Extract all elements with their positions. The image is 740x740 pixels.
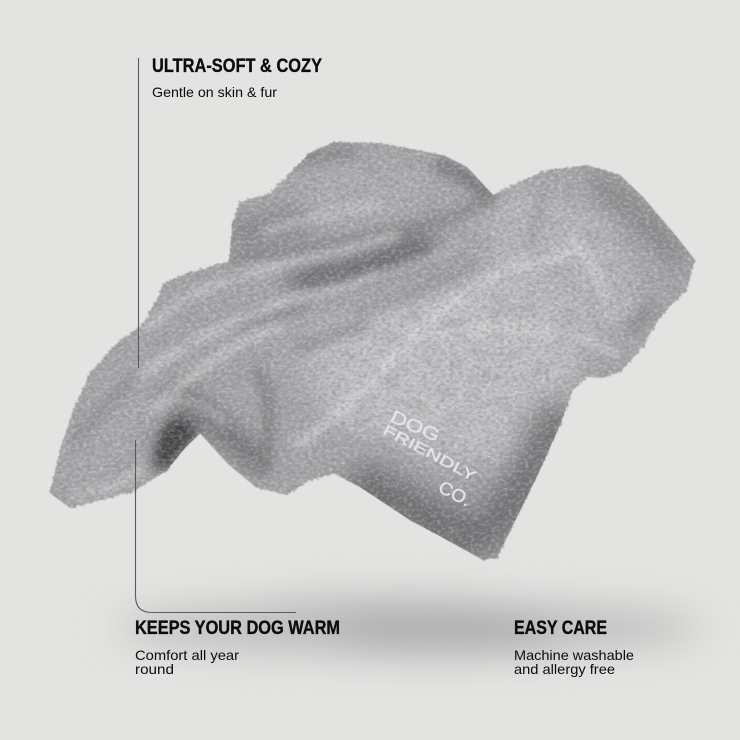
ground shadow <box>115 598 705 652</box>
feature: easy care: and allergy free <box>514 661 615 677</box>
feature: ultra-soft and cozy <box>152 56 322 100</box>
heading: EASY CARE <box>514 618 607 639</box>
blanket shading <box>40 130 710 570</box>
feature: easy care <box>514 618 634 677</box>
embroidered logo: DOG <box>387 406 443 446</box>
callout line <box>136 58 296 612</box>
embroidered logo: CO. <box>435 477 475 510</box>
embroidered logo: FRIENDLY <box>380 422 479 485</box>
embroidered logo <box>380 406 479 510</box>
blanket body <box>50 142 695 560</box>
heading: ULTRA-SOFT & COZY <box>152 56 322 77</box>
description: Gentle on skin & fur <box>152 84 277 100</box>
heading: KEEPS YOUR DOG WARM <box>135 618 340 639</box>
description: Machine washable <box>514 647 634 663</box>
feature: keeps your dog warm <box>135 618 340 677</box>
description: Comfort all year <box>135 647 239 663</box>
feature: keeps your dog warm: round <box>135 661 174 677</box>
blanket <box>40 130 710 570</box>
fur texture <box>53 178 691 536</box>
